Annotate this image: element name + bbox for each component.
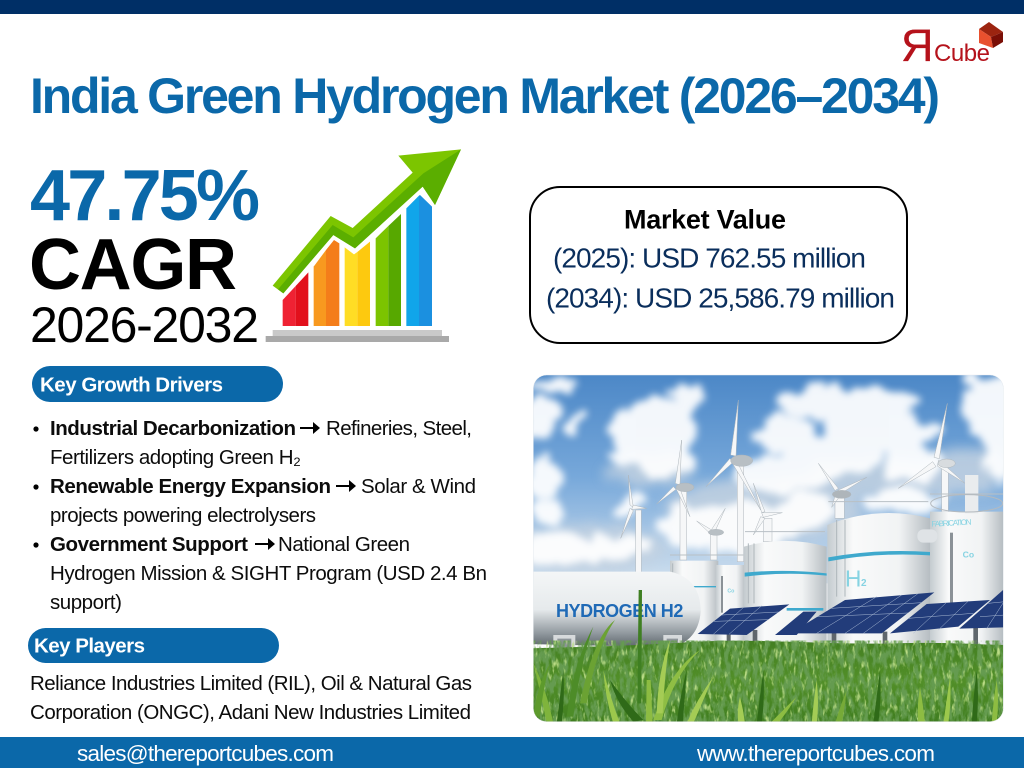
footer website: www.thereportcubes.com [696,741,935,766]
heading pill: key players [28,628,279,663]
driver: industrial decarbonization [33,417,472,469]
CAGR percentage: 47.75% [30,156,260,236]
tank labels: 2 [861,578,867,589]
solar panels [698,590,1004,644]
centre tank [744,541,827,645]
solar panel 4 [959,588,1005,629]
box outline [530,187,907,343]
heading pill: key players: Key Players [34,634,145,658]
back left tank [670,561,718,644]
driver: government support: Hydrogen Mission & SIGHT Program (USD 2.4 Bn [50,562,487,585]
key players text: Corporation (ONGC), Adani New Industries Limited [30,701,471,724]
wind turbine 4 [697,508,725,560]
driver: renewable energy expansion [33,475,476,527]
CAGR period: 2026-2032 [30,297,259,353]
wind turbine 1 [621,475,647,578]
driver: government support: National Green [278,533,410,556]
tank legs [553,635,682,648]
key players text: Reliance Industries Limited (RIL), Oil & Natural Gas [30,672,472,695]
tank labels: Co [727,588,735,594]
driver: industrial decarbonization: Fertilizers adopting Green H₂ [50,446,301,469]
icon: red cube [979,22,1003,48]
solar panel 3 [890,600,990,633]
ladders [673,520,845,603]
market value box [530,187,907,343]
hydrogen tank [530,572,701,650]
driver: renewable energy expansion: Renewable Energy Expansion [50,475,331,498]
solar panel 2 [790,592,934,633]
tank labels: H [845,566,861,592]
wind turbine 6 [818,463,867,518]
driver: government support: Government Support [50,533,248,556]
icon: growth bar chart with arrow [266,149,461,342]
small column [716,565,744,641]
heading pill: key growth drivers [32,366,283,402]
wind turbines [621,400,965,578]
right tower [930,512,1003,647]
driver: government support: support) [50,591,122,614]
photo edge [533,375,1003,722]
logo letter: Я [901,20,934,71]
heading pill: key growth drivers: Key Growth Drivers [40,374,223,396]
railings [670,494,1003,555]
CAGR stat block [29,156,260,353]
footer bar [0,737,1024,768]
logo: RCube [901,20,1003,71]
footer email: sales@thereportcubes.com [77,741,334,766]
panel stands [726,628,978,644]
driver: industrial decarbonization: Industrial Decarbonization [50,417,296,440]
large tank [827,513,930,645]
growth drivers bullet list [33,417,487,614]
back panel [775,612,817,635]
2034 value: (2034): USD 25,586.79 million [546,282,895,314]
key players text [30,672,472,724]
driver: renewable energy expansion: projects powering electrolysers [50,504,316,527]
cloud shadows [513,447,1003,573]
photo: hydrogen plant with turbines and solar panels [533,374,1004,722]
storage tanks [670,475,1003,647]
clouds [513,370,1018,567]
driver: renewable energy expansion: Solar & Wind [361,475,476,498]
wind turbine 2 [657,440,694,560]
tank labels [727,518,974,594]
market value heading: Market Value [624,204,786,234]
solar panel 1 [698,604,789,635]
CAGR label: CAGR [29,225,237,305]
logo word: Cube [934,40,990,67]
tank labels: FABRICATION [931,518,972,529]
driver: industrial decarbonization: Refineries, Steel, [326,417,472,440]
wind turbine 3 [706,400,761,562]
sky [530,370,1010,583]
2025 value: (2025): USD 762.55 million [553,242,866,274]
grass field [530,590,1010,730]
tank label: HYDROGEN H2 [556,601,683,621]
wind turbine 7 [898,403,965,512]
pipe and stack [965,475,978,513]
foreground blades [533,590,998,723]
wind turbine 5 [753,483,782,542]
top navy bar [0,0,1024,14]
driver: government support [33,533,487,614]
tank labels: Co [963,550,974,560]
title: India Green Hydrogen Market (2026–2034) [30,68,940,124]
blue stripes [687,551,930,611]
